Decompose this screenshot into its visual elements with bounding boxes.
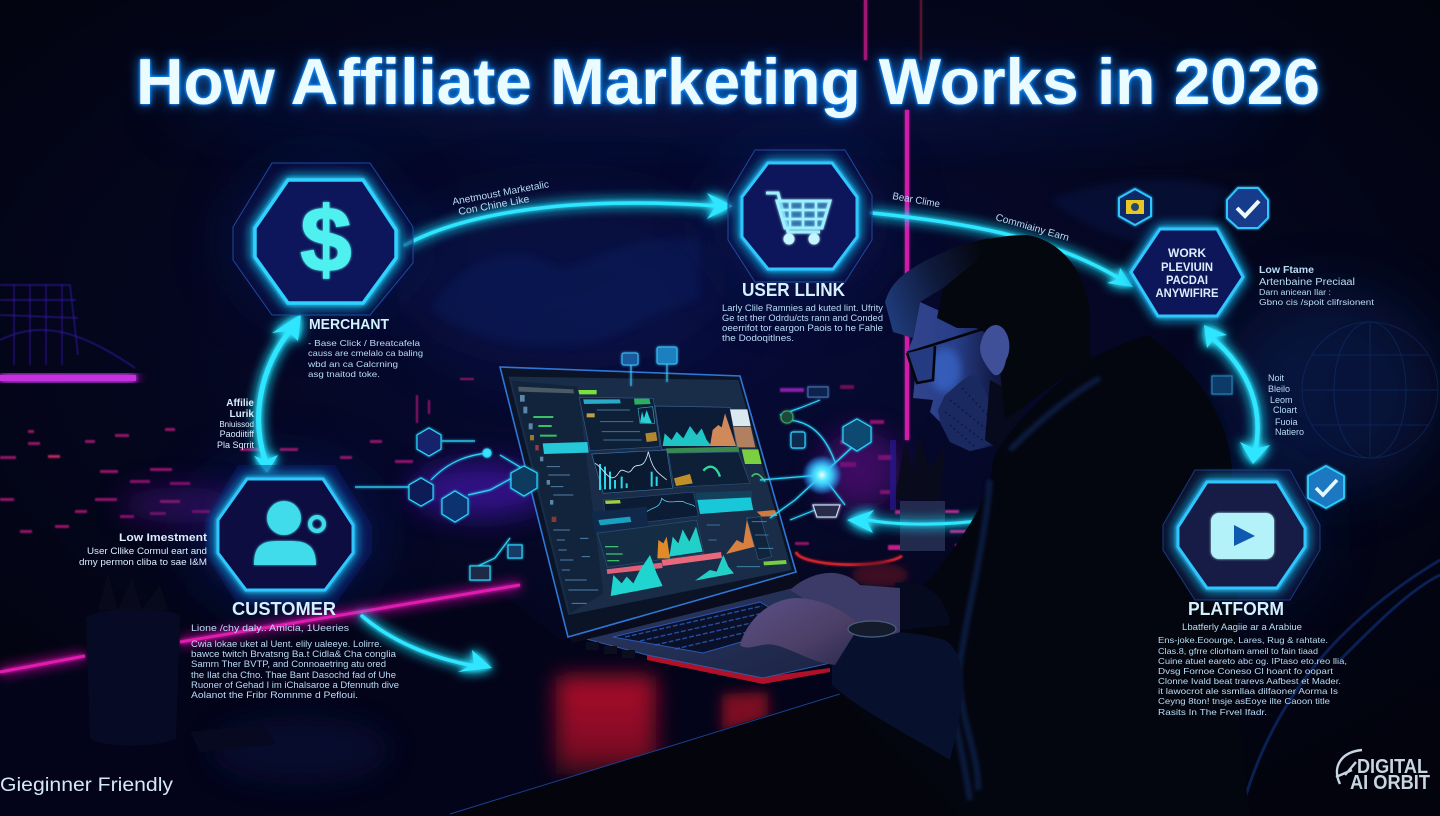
laptop deck (575, 585, 835, 678)
beginner friendly caption: Gieginner Friendly (0, 775, 174, 796)
merchant description: causs are cmelalo ca baling (308, 348, 423, 358)
hinge (568, 568, 801, 643)
platform description: Ceyng 8ton! tnsje asEoye ilte Caoon title (1158, 696, 1330, 706)
customer description: the Ilat cha Cfno. Thae Bant Dasochd fad of Uhe (191, 670, 396, 680)
customer description: Samrn Ther BVTP, and Connoaetring atu ored (191, 659, 386, 669)
cuff (895, 582, 950, 630)
customer description (191, 639, 399, 700)
arrow: customer to laptop (362, 616, 492, 672)
logo wordmark: AI ORBIT (1350, 772, 1430, 794)
arrow caption: bear click: Bear Clime (891, 191, 941, 210)
low investment note (79, 532, 207, 567)
low investment note: dmy permon cliba to sae I&M (79, 557, 207, 567)
merchant label: MERCHANT (309, 316, 389, 333)
neon strip: vertical pink (864, 0, 922, 440)
hair front light (885, 238, 990, 338)
customer description: Ruoner of Gehad I im iChalsaroe a Dfennuth dive (191, 680, 399, 690)
glasses (907, 329, 983, 383)
work anywhere description: Gbno cis /spoit clifrsionent (1259, 298, 1375, 307)
merchant description (307, 338, 423, 379)
arrow caption: affiliate link: Affilie (226, 398, 254, 409)
node: customer (191, 465, 399, 700)
node: user link (722, 150, 884, 343)
work anywhere description: Low Ftame (1259, 265, 1314, 276)
platform frame (1178, 482, 1305, 588)
arrow caption: commission earn: Commiainy Earn (994, 212, 1070, 244)
logo wordmark (1350, 756, 1430, 794)
neck shadow (985, 380, 1030, 448)
work anywhere text: PLEVIUIN (1161, 260, 1213, 274)
world map backdrop (430, 179, 1230, 346)
customer label: CUSTOMER (232, 599, 336, 619)
arrow caption: affiliate link: Bniuissod (219, 420, 254, 429)
merchant frame (255, 180, 396, 303)
laptop (500, 367, 835, 684)
cheek highlight (929, 348, 961, 392)
arrow caption: affiliate link (217, 398, 254, 450)
user link label: USER LLINK (742, 280, 845, 300)
customer outer hexagon (205, 465, 372, 605)
arrow caption: work platform list: Leom (1270, 395, 1293, 405)
beard stubble (945, 388, 992, 447)
low investment note: User Cllike Cormul eart and (87, 546, 207, 556)
laptop lid (500, 367, 796, 637)
arrow caption: affiliate link: Pla Sqrrit (217, 440, 254, 450)
merchant description: wbd an ca Calcrning (307, 359, 398, 369)
beard (938, 375, 997, 451)
network nodes: left of laptop (355, 428, 537, 580)
work anywhere description (1259, 265, 1375, 307)
merchant description: asg tnaitod toke. (308, 369, 380, 379)
platform description: it lawocrot ale ssmllaa dilfaoner Aorma Is (1158, 686, 1338, 696)
chair outline (1240, 560, 1440, 816)
neon strip: floor pink (0, 585, 520, 672)
icon: dollar sign: $ (300, 189, 352, 291)
arrow caption: work platform list: Noit (1268, 373, 1285, 383)
key rows (625, 606, 790, 649)
platform description: Ens-joke.Eoourge, Lares, Rug & rahtate. (1158, 635, 1328, 645)
customer frame (218, 479, 353, 590)
arrow caption: affiliate link: Paodiitiff (220, 429, 254, 439)
arrow caption: affiliate marketing: Anetmoust Marketalic (452, 179, 550, 208)
logo wordmark: DIGITAL (1357, 756, 1428, 778)
hoodie (832, 335, 1250, 816)
arrow caption: work platform list: Bleilo (1268, 384, 1290, 394)
user link description: oeerrifot tor eargon Paois to he Fahle (722, 323, 883, 333)
arrow: work anywhere and platform two-way (1204, 325, 1270, 464)
arrow: user link to work anywhere (872, 213, 1133, 287)
purple glow behind network (120, 430, 900, 523)
arrow caption: work platform list: Fuoia (1275, 417, 1298, 427)
ear (980, 325, 1009, 375)
city wireframe (0, 285, 135, 368)
arrow: customer and merchant two-way (254, 314, 301, 473)
customer description: Aolanot the Fribr Romnme d Pefloui. (191, 690, 358, 700)
work anywhere description: Darn anicean Ilar : (1259, 288, 1331, 297)
user link description (722, 303, 884, 343)
arrow caption: affiliate marketing: Con Chine Like (458, 194, 531, 218)
icon: shopping cart (766, 193, 830, 244)
badge: yellow icon (1119, 189, 1151, 225)
user link outer hexagon (728, 150, 872, 282)
merchant outer hexagon (233, 163, 413, 315)
hoodie highlights (862, 378, 1100, 800)
node: platform (1158, 470, 1347, 717)
sleeve (832, 632, 963, 760)
platform description: Rasits In The Frvel Ifadr. (1158, 707, 1267, 717)
city lights: magenta dashes (0, 378, 982, 550)
ports (586, 642, 635, 658)
work anywhere description: Artenbaine Preciaal (1259, 277, 1355, 288)
arrow caption: work platform list (1268, 373, 1304, 437)
face and neck (907, 302, 1015, 451)
hair (885, 235, 1090, 420)
arrow: merchant to user link (405, 193, 733, 245)
badge: platform checkmark (1308, 466, 1344, 508)
user link description: the Dodoqitlnes. (722, 333, 794, 343)
icon: play button (1211, 513, 1274, 559)
node: merchant (233, 163, 423, 379)
network nodes: right of laptop (760, 400, 871, 520)
work anywhere text: PACDAI (1166, 273, 1208, 287)
desk surface (0, 552, 1000, 816)
pen cup (86, 572, 180, 746)
platform description: Clonne Ivald beat trarevs Aafbest et Mader. (1158, 676, 1341, 686)
platform description (1158, 635, 1347, 717)
platform subtitle: Lbatferly Aagiie ar a Arabiue (1182, 622, 1302, 632)
floating dashboard widgets (622, 347, 828, 397)
red base edge (647, 655, 830, 684)
arrow caption: affiliate link: Lurik (230, 409, 254, 420)
merchant description: - Base Click / Breatcafela (308, 338, 420, 348)
platform label: PLATFORM (1188, 599, 1284, 619)
user link description: Ge tet ther Odrdu/cts rann and Conded (722, 313, 883, 323)
low investment note: Low Imestment (119, 532, 207, 544)
arrow caption: work platform list: Cloart (1273, 405, 1298, 415)
user link frame (742, 163, 857, 269)
small glowing square icon (1212, 376, 1232, 394)
brand logo (1336, 750, 1430, 794)
customer description: Cwia lokae uket al Uent. elily ualeeye. Lolirre. (191, 639, 382, 649)
badge: checkmark (1227, 188, 1268, 228)
work anywhere text: ANYWIFIRE (1156, 286, 1218, 300)
work anywhere frame (1131, 229, 1243, 316)
customer subtitle: Lione /chy daly.. Amicia, 1Ueeries (191, 623, 350, 633)
right hand (740, 598, 860, 665)
dashboard screen (508, 377, 792, 615)
platform description: Clas.8, gfrre cliorham ameil to fain tiaad (1158, 646, 1318, 656)
arrow caption: work platform list: Natiero (1275, 427, 1304, 437)
work anywhere text: WORK (1168, 246, 1206, 260)
title: How Affiliate Marketing Works in 2026 (136, 45, 1320, 118)
plant and mug on back shelf (890, 435, 945, 551)
customer description: bawce twitch Brvatsng Ba.t Cidla& Cha conglia (191, 649, 396, 659)
phone on desk (190, 724, 276, 752)
person at laptop (740, 235, 1440, 816)
platform outer hexagon (1163, 470, 1320, 600)
platform description: Cuine atuel eareto abc og. IPtaso eto.reo llia, (1158, 656, 1347, 666)
icon: person (254, 501, 324, 565)
platform description: Dvsg Fornoe Coneso Cl hoant fo oopart (1158, 666, 1334, 676)
logo swoosh (1336, 750, 1362, 784)
work anywhere text (1156, 246, 1218, 300)
node: work anywhere (1131, 229, 1243, 316)
neon strip: left wall (0, 375, 136, 381)
globe grid (1302, 322, 1438, 458)
user link description: Larly Clile Ramnies ad kuted lint. Ufrity (722, 303, 884, 313)
left hand (790, 573, 900, 636)
watch (848, 621, 896, 637)
arrow: platform to laptop (847, 510, 985, 533)
keyboard (613, 602, 800, 653)
